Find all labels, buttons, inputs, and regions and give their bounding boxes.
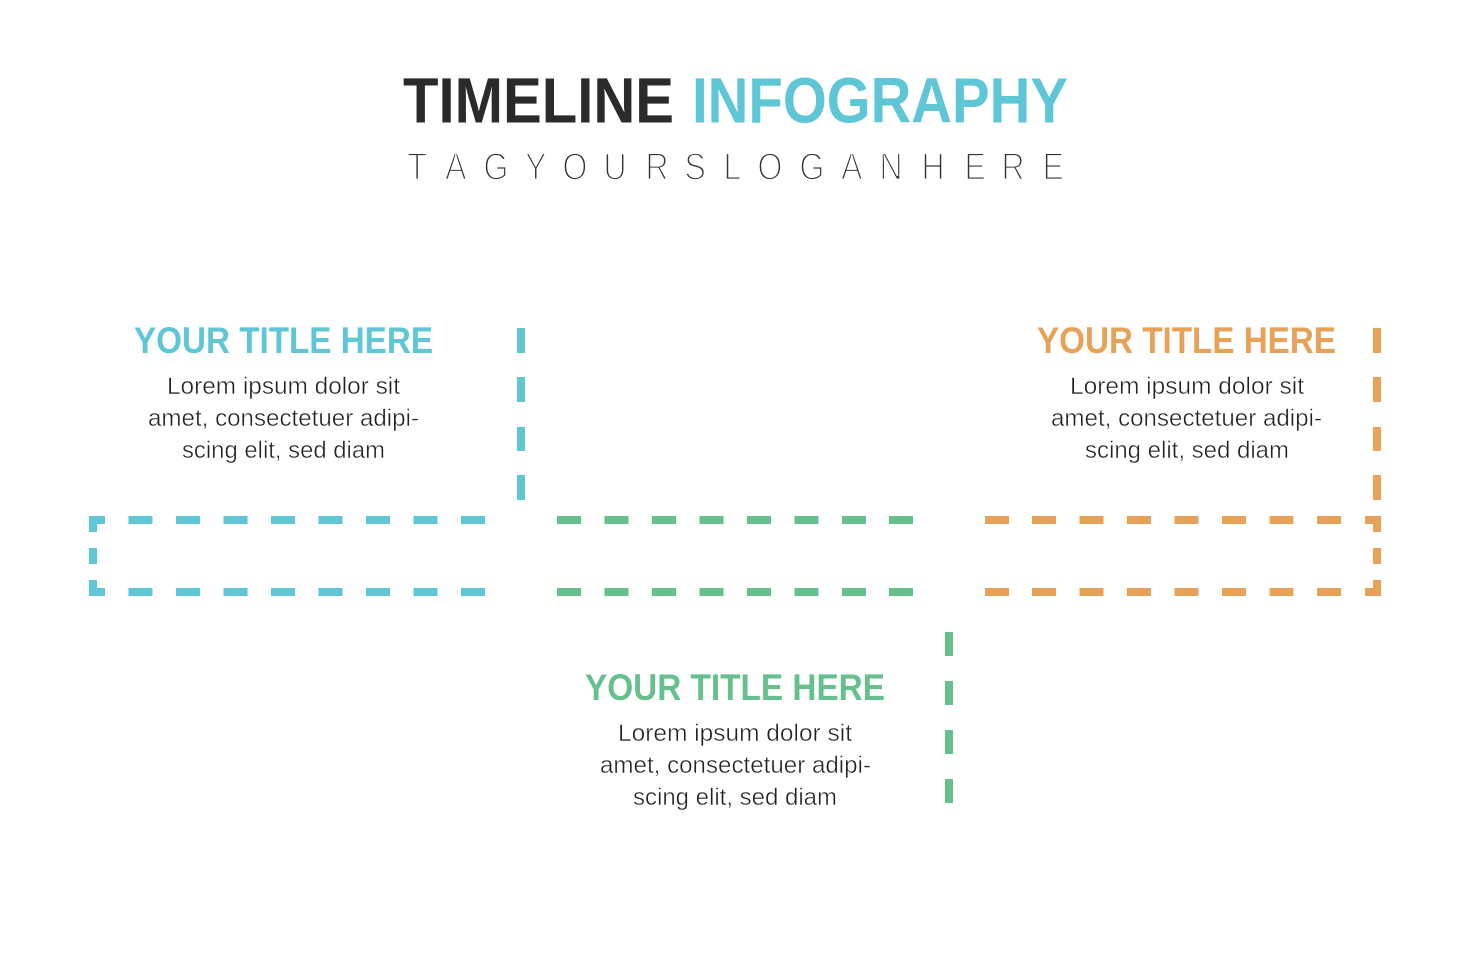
text block: orange description (1051, 373, 1322, 464)
text block: green description: amet, consectetuer adipi- (600, 752, 871, 779)
timeline segment: green dashes (557, 516, 913, 596)
panel: green step (557, 516, 953, 811)
title: INFOGRAPHY (692, 64, 1068, 136)
heading: blue title: YOUR TITLE HERE (134, 320, 433, 361)
text block: blue description: scing elit, sed diam (182, 437, 385, 464)
heading: orange title: YOUR TITLE HERE (1037, 320, 1336, 361)
text block: green description (600, 720, 871, 811)
timeline segment: orange dashed bracket (985, 516, 1381, 596)
title (403, 64, 1068, 136)
text block: blue description: Lorem ipsum dolor sit (167, 373, 400, 400)
text block: orange description: Lorem ipsum dolor sit (1070, 373, 1304, 400)
text block: green description: scing elit, sed diam (633, 784, 837, 811)
text block: orange description: amet, consectetuer adipi- (1051, 405, 1322, 432)
connector: orange vertical dashes (1373, 328, 1381, 500)
connector: green vertical dashes (945, 632, 953, 803)
text block: green description: Lorem ipsum dolor sit (618, 720, 852, 747)
panel: blue step (89, 320, 525, 596)
timeline segment: blue dashed bracket (89, 516, 485, 596)
text block: blue description: amet, consectetuer adipi- (148, 405, 419, 432)
text block: blue description (148, 373, 419, 464)
text block: orange description: scing elit, sed diam (1085, 437, 1289, 464)
connector: blue vertical dashes (517, 328, 525, 500)
title: TIMELINE (403, 64, 674, 136)
subtitle slogan: TAGYOURSLOGANHERE (407, 146, 1064, 188)
heading: green title: YOUR TITLE HERE (585, 667, 885, 708)
panel: orange step (985, 320, 1381, 596)
